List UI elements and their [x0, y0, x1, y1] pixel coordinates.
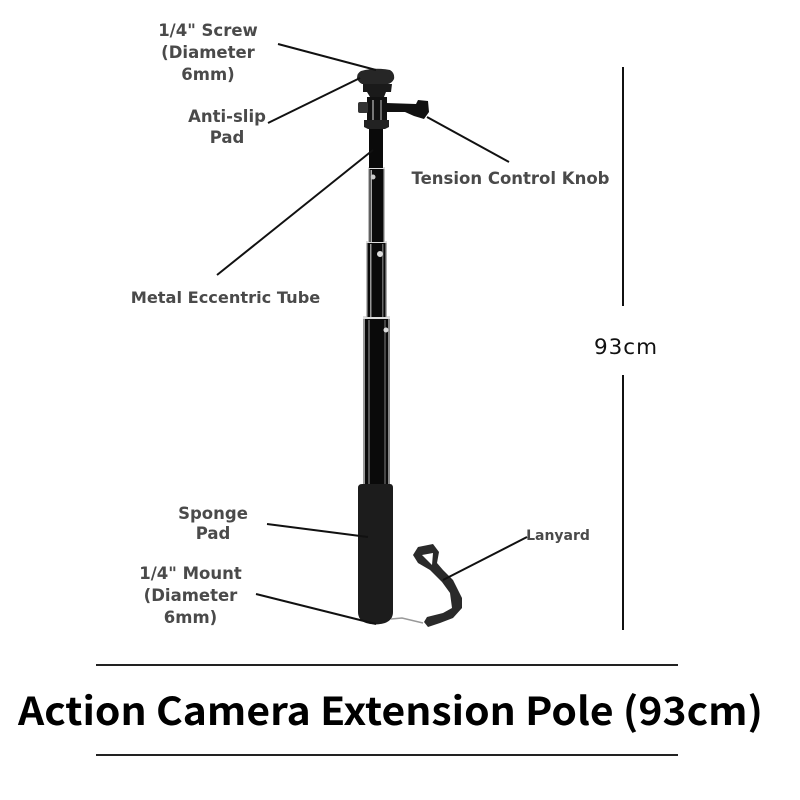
extension pole [357, 69, 462, 627]
label: tension control knob: Tension Control Knob [412, 169, 610, 188]
title rule top [96, 664, 678, 666]
mount head [363, 84, 392, 97]
lanyard [413, 544, 462, 627]
label: 1/4 inch screw: 6mm) [181, 65, 235, 84]
dimension label: 93cm [594, 335, 658, 360]
dimension line [622, 67, 624, 630]
label: anti-slip pad: Pad [210, 128, 244, 147]
title rule bottom [96, 754, 678, 756]
sponge grip [358, 484, 393, 624]
clamp ring [364, 120, 389, 129]
safety wire [391, 618, 423, 623]
label: metal eccentric tube: Metal Eccentric Tube [131, 288, 320, 307]
label: anti-slip pad: Anti-slip [188, 107, 266, 126]
label: 1/4 inch mount: 6mm) [164, 608, 217, 627]
top screw disc [357, 69, 394, 84]
label: 1/4 inch mount: 1/4" Mount [139, 564, 242, 583]
tension knob arm [386, 100, 429, 119]
title: Action Camera Extension Pole (93cm) [17, 681, 763, 737]
label: 1/4 inch screw: (Diameter [161, 43, 256, 62]
label: 1/4 inch screw: 1/4" Screw [158, 21, 258, 40]
tube section 3 [366, 241, 387, 317]
label: 1/4 inch mount: (Diameter [144, 586, 238, 605]
label: lanyard: Lanyard [526, 528, 590, 544]
tube section 2 [368, 167, 385, 242]
clamp body [367, 97, 387, 120]
leader lines [217, 44, 527, 624]
label: sponge pad: Sponge [178, 504, 248, 523]
tube section 1 [369, 126, 383, 168]
tube section 4 [363, 316, 390, 488]
label: sponge pad: Pad [196, 524, 230, 543]
